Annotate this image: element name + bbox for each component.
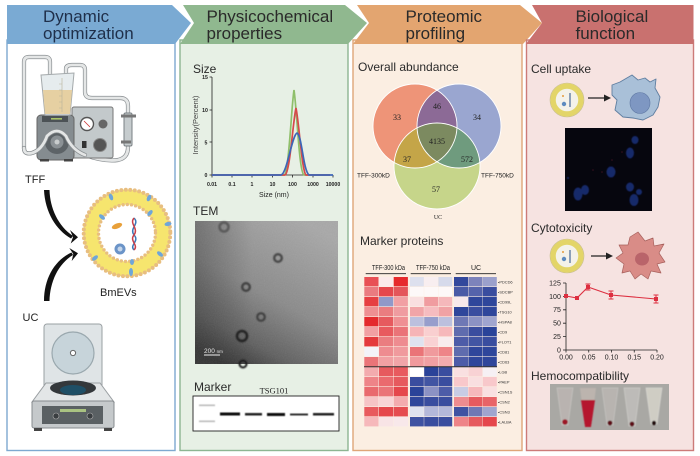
- header: dynamic optimization: optimization: [43, 24, 134, 43]
- chart: cytotoxicity line chart: 0.05: [582, 354, 596, 362]
- icon: red cell: [616, 232, 665, 279]
- chart: size distribution: 10: [270, 182, 275, 188]
- panel: physicochemical properties: [180, 5, 367, 450]
- panel: dynamic optimization: [7, 5, 191, 450]
- image: TSG101 western blot: [193, 396, 339, 431]
- chart: venn diagram: UC: [434, 215, 442, 221]
- chart: size distribution: 0: [205, 173, 208, 179]
- chart: size distribution: 0.1: [228, 182, 236, 188]
- chart: size distribution: 1000: [307, 182, 319, 188]
- header: physicochemical properties: Physicochemical: [206, 7, 333, 26]
- chart: marker protein heatmap: •LALBA: [498, 420, 512, 424]
- icon: blue cell: [612, 75, 660, 120]
- chart: marker protein heatmap: •CD63: [498, 360, 509, 364]
- chart: marker protein heatmap: •LGB: [498, 370, 508, 374]
- chart: marker protein heatmap: •CSN3: [498, 410, 510, 414]
- icon: TFF peristaltic pump: [24, 57, 136, 162]
- panel: biological function: [526, 5, 694, 450]
- label: BmEVs: BmEVs: [100, 287, 137, 299]
- chart: cytotoxicity line chart: 0.00: [559, 354, 573, 362]
- chart: marker protein heatmap: TFF-750 kDa: [416, 265, 450, 272]
- heading: overall abundance: Overall abundance: [358, 60, 459, 74]
- icon: vesicle cytotoxicity: [550, 239, 584, 273]
- chart: venn diagram: 33: [393, 113, 401, 122]
- label: TFF: TFF: [25, 174, 45, 186]
- chart: venn diagram: [357, 84, 514, 221]
- chart: cytotoxicity line chart: 25: [553, 334, 561, 341]
- chart: marker protein heatmap: •CD99L: [498, 300, 512, 304]
- icon: centrifuge: [32, 324, 114, 431]
- header: physicochemical properties: properties: [206, 24, 282, 43]
- heading: hemocompatibility: Hemocompatibility: [531, 369, 629, 383]
- chart: size distribution: 10: [202, 108, 208, 114]
- arrow: vesicle to macrophage: [588, 94, 611, 102]
- chart: size distribution: [191, 75, 340, 199]
- chart: marker protein heatmap: UC: [471, 265, 481, 272]
- chart: size distribution: Size (nm): [259, 192, 289, 199]
- chart: marker protein heatmap: •TSG10: [498, 310, 513, 314]
- chart: marker protein heatmap: •SDCBP: [498, 290, 513, 294]
- chart: venn diagram: 34: [473, 113, 481, 122]
- header: dynamic optimization: [7, 5, 191, 44]
- chart: venn diagram: 572: [461, 155, 473, 164]
- image: TEM micrograph: [195, 221, 338, 368]
- heading: size: Size: [193, 62, 217, 76]
- chart: venn diagram: TFF-750kD: [481, 172, 514, 180]
- header: proteomic profiling: Proteomic: [406, 7, 483, 26]
- chart: cytotoxicity line chart: 75: [553, 307, 561, 314]
- heading: marker: Marker: [194, 380, 231, 394]
- chart: marker protein heatmap: •PDCD6: [498, 280, 513, 284]
- chart: cytotoxicity line chart: 0.10: [605, 354, 618, 362]
- chart: marker protein heatmap: •CSN1S: [498, 390, 513, 394]
- chart: venn diagram: 46: [433, 102, 441, 111]
- arrow: UC to BmEVs: [44, 248, 78, 301]
- heading: TEM: TEM: [193, 204, 218, 218]
- chart: cytotoxicity line chart: 0: [557, 347, 561, 354]
- header: proteomic profiling: [353, 5, 542, 44]
- panel: proteomic profiling: [353, 5, 542, 450]
- chart: cytotoxicity line chart: 125: [549, 280, 561, 287]
- chart: size distribution: 100: [288, 182, 297, 188]
- chart: size distribution: 0.01: [207, 182, 217, 188]
- scale bar: 200 nm: [204, 348, 223, 355]
- chart: cytotoxicity line chart: 100: [549, 294, 561, 301]
- heading: cell uptake: Cell uptake: [531, 62, 591, 76]
- chart: size distribution: 1: [251, 182, 254, 188]
- arrow: vesicle to cell: [591, 252, 613, 260]
- header: biological function: [526, 5, 694, 44]
- chart: marker protein heatmap: TFF-300 kDa: [372, 265, 405, 272]
- chart: venn diagram: 37: [403, 155, 411, 164]
- icon: BmEV vesicle: [84, 190, 172, 276]
- label: UC: UC: [22, 312, 38, 324]
- chart: marker protein heatmap: [364, 265, 513, 426]
- chart: cytotoxicity line chart: 0.15: [627, 354, 641, 362]
- heading: marker proteins: Marker proteins: [360, 234, 443, 248]
- chart: cytotoxicity line chart: 0.20: [650, 354, 664, 362]
- heading: cytotoxicity: Cytotoxicity: [531, 221, 592, 235]
- chart: size distribution: 5: [205, 140, 208, 146]
- arrow: TFF to BmEVs: [44, 190, 78, 244]
- header: biological function: Biological: [576, 7, 648, 26]
- chart: marker protein heatmap: •CSN2: [498, 400, 510, 404]
- chart: cytotoxicity line chart: 50: [553, 321, 561, 328]
- chart: marker protein heatmap: •CD81: [498, 350, 509, 354]
- header: proteomic profiling: profiling: [406, 24, 465, 43]
- icon: vesicle uptake: [550, 83, 584, 117]
- header: physicochemical properties: [180, 5, 367, 44]
- chart: cytotoxicity line chart: [549, 280, 664, 362]
- chart: marker protein heatmap: •PAEP: [498, 380, 510, 384]
- chart: venn diagram: TFF-300kD: [357, 172, 390, 180]
- chart: venn diagram: 57: [432, 185, 440, 194]
- chart: size distribution: 10000: [326, 182, 340, 188]
- label: TSG101: TSG101: [260, 386, 288, 396]
- chart: size distribution: Intensity(Percent): [191, 95, 200, 154]
- image: fluorescence micrograph: [565, 128, 652, 211]
- chart: size distribution: 15: [202, 75, 208, 81]
- header: biological function: function: [576, 24, 635, 43]
- chart: marker protein heatmap: •FLOT1: [498, 340, 511, 344]
- chart: marker protein heatmap: •HSPA8: [498, 320, 512, 324]
- header: dynamic optimization: Dynamic: [43, 7, 110, 26]
- chart: marker protein heatmap: •CD9: [498, 330, 507, 334]
- image: hemolysis tubes: [550, 384, 669, 430]
- chart: venn diagram: 4135: [429, 137, 445, 146]
